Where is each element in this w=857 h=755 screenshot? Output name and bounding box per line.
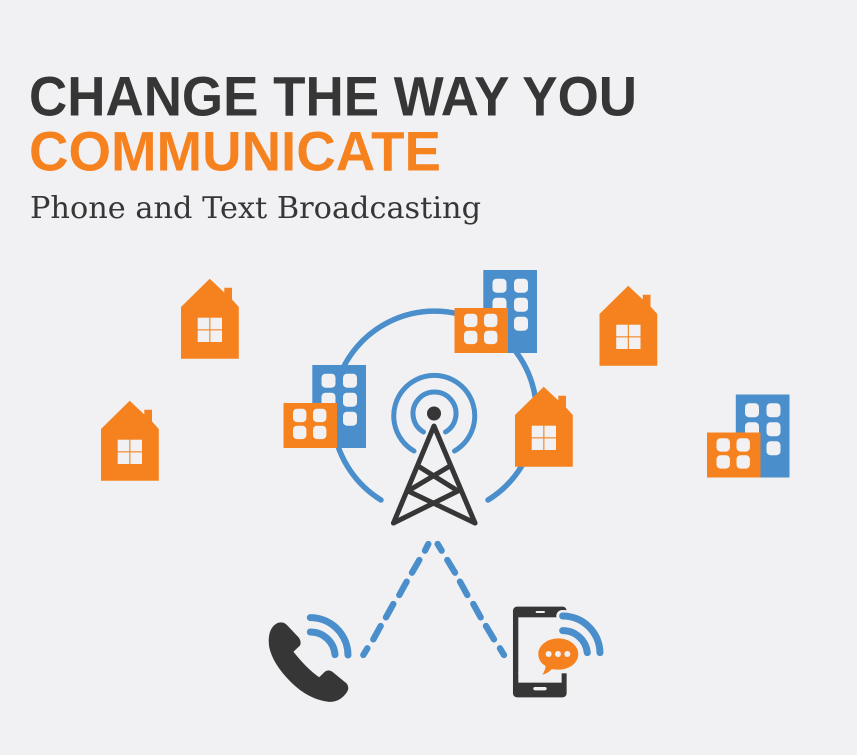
icon: house top right [600,286,657,366]
title: CHANGE THE WAY YOU [29,64,637,128]
icon: house far left [101,401,159,481]
coverage ring [332,311,536,500]
icon: smartphone with message bubble and signal [513,607,600,697]
icon: telephone handset with signal [270,618,348,701]
icon: house top left [181,279,239,359]
icon: broadcast tower [394,375,475,523]
title [29,64,637,182]
subtitle: Phone and Text Broadcasting [30,191,481,226]
dashed signal lines [363,544,504,655]
title: COMMUNICATE [29,120,441,182]
icon: buildings far right [707,394,790,478]
icon: house on ring [515,387,573,467]
icon: buildings on ring top [454,270,537,353]
icon: buildings on ring left [284,365,366,448]
